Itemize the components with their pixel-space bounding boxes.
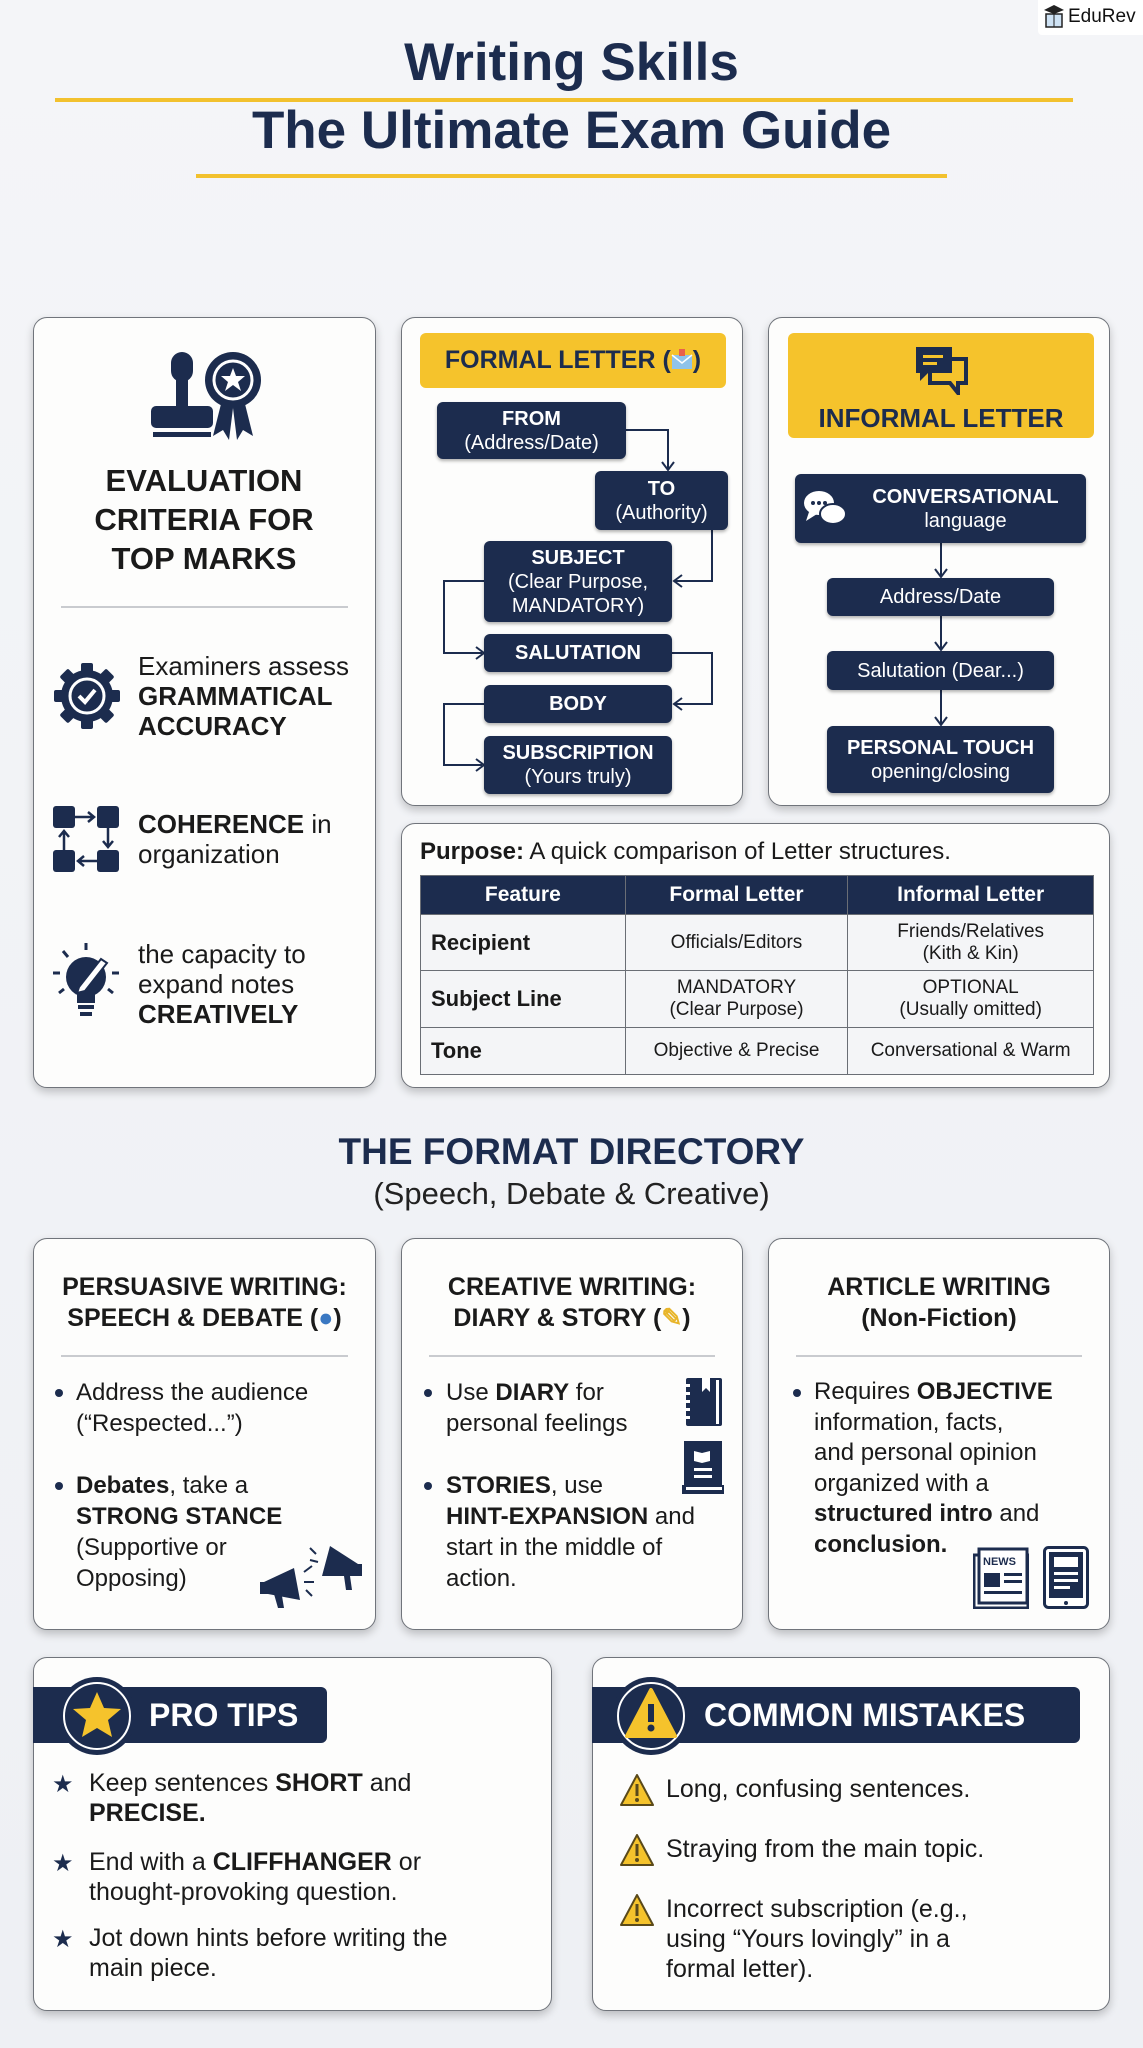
bullet: address audience: (“Respected...”): [76, 1410, 243, 1437]
bullet: debates: STRONG STANCE: [76, 1503, 282, 1530]
icon: megaphones: [260, 1546, 362, 1608]
bullet: stories: STORIES, use: [446, 1472, 603, 1499]
logo: EduRev: EduRev: [1068, 6, 1136, 27]
text: creatively: expand notes: [138, 969, 294, 999]
text: grammatical accuracy: ACCURACY: [138, 711, 287, 741]
table: letter comparison: Subject Line: [431, 986, 562, 1011]
bullet: stories: HINT-EXPANSION and: [446, 1503, 695, 1530]
bullet: objective: and personal opinion: [814, 1439, 1037, 1466]
logo: EduRev: [1038, 0, 1143, 35]
text: grammatical accuracy: [138, 651, 349, 741]
table: letter comparison: Feature: [485, 883, 561, 906]
heading: format directory: THE FORMAT DIRECTORY: [339, 1131, 804, 1172]
table: letter comparison: Tone: [431, 1038, 482, 1063]
box: body: BODY: [549, 693, 607, 715]
box: personal touch: [827, 726, 1054, 793]
text: grammatical accuracy: Examiners assess: [138, 651, 349, 681]
bullet: cliffhanger: [52, 1848, 421, 1906]
box: conversational: CONVERSATIONAL: [872, 486, 1059, 508]
table: letter comparison: OPTIONAL: [923, 977, 1019, 998]
panel: persuasive writing: [33, 1238, 376, 1630]
table: letter comparison: (Clear Purpose): [669, 999, 804, 1020]
box: address/date: Address/Date: [880, 586, 1001, 608]
heading: formal letter: [420, 333, 726, 388]
heading: evaluation criteria: CRITERIA FOR: [94, 502, 314, 537]
heading: format directory: (Speech, Debate & Creative): [373, 1176, 770, 1211]
heading: creative: DIARY & STORY (✎): [453, 1304, 691, 1332]
bullet: objective: [793, 1378, 1053, 1558]
heading: creative: CREATIVE WRITING:: [448, 1273, 696, 1301]
box: to: (Authority): [615, 502, 708, 524]
table: letter comparison: Formal Letter: [669, 883, 804, 906]
text: creatively: CREATIVELY: [138, 999, 298, 1029]
arrows: informal flow: [934, 543, 948, 726]
text: purpose: Purpose: A quick comparison of Letter structures.: [420, 838, 951, 865]
heading: informal letter: [788, 333, 1094, 438]
bullet: jot hints: [52, 1924, 448, 1982]
table: letter comparison: Conversational & Warm: [871, 1040, 1071, 1061]
icon: chat bubbles: [916, 347, 968, 395]
box: from: (Address/Date): [464, 432, 599, 454]
icon: diary: [686, 1378, 722, 1426]
box: salutation: [484, 634, 672, 672]
table: letter comparison: (Usually omitted): [899, 999, 1042, 1020]
heading: evaluation criteria: [94, 463, 314, 576]
title: [55, 33, 1073, 178]
title: Writing Skills: [404, 33, 739, 92]
box: salutation: [827, 651, 1054, 690]
icon: book: [682, 1441, 724, 1494]
bullet: jot hints: main piece.: [89, 1954, 217, 1982]
heading: evaluation criteria: TOP MARKS: [112, 541, 296, 576]
bullet: objective: organized with a: [814, 1470, 989, 1497]
box: body: [484, 685, 672, 723]
icon: gear check: [54, 663, 120, 729]
heading: creative: [448, 1273, 696, 1332]
heading: article: [827, 1273, 1051, 1332]
box: subscription: [484, 736, 672, 794]
box: from: [437, 402, 626, 459]
heading: formal letter: FORMAL LETTER ( ): [445, 346, 701, 374]
box: personal touch: PERSONAL TOUCH: [847, 736, 1034, 758]
box: subject: MANDATORY): [512, 594, 644, 616]
heading: evaluation criteria: EVALUATION: [106, 463, 302, 498]
bullet: stories: start in the middle of: [446, 1534, 662, 1561]
box: subscription: SUBSCRIPTION: [502, 742, 654, 764]
box: personal touch: opening/closing: [871, 760, 1010, 782]
bullet: debates: [55, 1472, 282, 1592]
bullet: address audience: [55, 1379, 308, 1437]
box: salutation: SALUTATION: [515, 642, 641, 664]
bullet: stories: [424, 1472, 695, 1592]
heading: article: ARTICLE WRITING: [827, 1273, 1051, 1301]
bullet: objective: Requires OBJECTIVE: [814, 1378, 1053, 1405]
bullet: short precise: Keep sentences SHORT and: [89, 1769, 411, 1797]
text: creatively: the capacity to: [138, 939, 306, 969]
bullet: debates: (Supportive or: [76, 1534, 227, 1561]
icon: newspaper: NEWS: [983, 1556, 1016, 1568]
box: subject: (Clear Purpose,: [508, 570, 648, 592]
panel: evaluation criteria: [33, 317, 376, 1088]
banner: pro tips: [33, 1687, 327, 1743]
icon: lightbulb pencil: [53, 943, 119, 1016]
bullet: short precise: [52, 1769, 411, 1827]
bullet: diary: [424, 1379, 627, 1437]
table: letter comparison: Informal Letter: [897, 883, 1044, 906]
table: letter comparison: [420, 875, 1094, 1075]
icon: star badge: [63, 1677, 131, 1755]
bullet: objective: structured intro and: [814, 1500, 1039, 1527]
panel: formal letter: [401, 317, 743, 806]
table: letter comparison: (Kith & Kin): [923, 942, 1019, 964]
panel: common mistakes: [592, 1657, 1110, 2011]
text: coherence: [138, 809, 332, 869]
icon: newspaper: [973, 1548, 1029, 1609]
banner: common mistakes: COMMON MISTAKES: [704, 1697, 1025, 1733]
bullet: cliffhanger: thought-provoking question.: [89, 1878, 398, 1906]
bullet: jot hints: Jot down hints before writing the: [89, 1924, 448, 1952]
arrows: formal flow: [443, 429, 713, 772]
table: letter comparison: Objective & Precise: [654, 1040, 819, 1061]
table: letter comparison: Friends/Relatives: [897, 920, 1044, 942]
bullet: incorrect subscription: Incorrect subscription (e.g.,: [666, 1895, 968, 1923]
bullet: short precise: ★: [52, 1771, 74, 1798]
heading: persuasive: [62, 1273, 347, 1332]
bullet: diary: Use DIARY for: [446, 1379, 604, 1406]
bullet: debates: Debates, take a: [76, 1472, 248, 1499]
icon: warning badge: [617, 1677, 685, 1755]
icon: tablet: [1043, 1546, 1089, 1609]
bullet: objective: conclusion.: [814, 1531, 947, 1558]
panel: creative writing: [401, 1238, 743, 1630]
title: The Ultimate Exam Guide: [252, 101, 891, 160]
table: letter comparison: Recipient: [431, 930, 530, 954]
banner: common mistakes: [592, 1687, 1080, 1743]
bullet: debates: Opposing): [76, 1565, 187, 1592]
heading: persuasive: PERSUASIVE WRITING:: [62, 1273, 347, 1301]
bullet: jot hints: ★: [52, 1926, 74, 1953]
icon: flow squares: [53, 806, 119, 872]
banner: pro tips: PRO TIPS: [149, 1697, 298, 1733]
bullet: long sentences: Long, confusing sentences.: [666, 1775, 970, 1803]
box: to: [595, 471, 728, 530]
text: grammatical accuracy: GRAMMATICAL: [138, 681, 332, 711]
bullet: straying: Straying from the main topic.: [666, 1835, 984, 1863]
heading: format directory: [338, 1131, 804, 1211]
box: conversational: language: [924, 510, 1007, 532]
panel: comparison table: [401, 823, 1110, 1088]
bullet: diary: personal feelings: [446, 1410, 627, 1437]
box: conversational: [795, 474, 1086, 543]
box: salutation: Salutation (Dear...): [857, 660, 1024, 682]
box: subscription: (Yours truly): [524, 766, 632, 788]
panel: pro tips: [33, 1657, 552, 2011]
box: from: FROM: [502, 408, 561, 430]
bullet: incorrect subscription: [620, 1894, 968, 1983]
bullet: cliffhanger: End with a CLIFFHANGER or: [89, 1848, 421, 1876]
text: creatively: [138, 939, 306, 1029]
table: letter comparison: Officials/Editors: [671, 932, 802, 952]
heading: informal letter: INFORMAL LETTER: [818, 403, 1064, 433]
icon: stamp and medal: [151, 352, 261, 440]
bullet: objective: information, facts,: [814, 1409, 1003, 1436]
bullet: incorrect subscription: formal letter).: [666, 1955, 813, 1983]
bullet: cliffhanger: ★: [52, 1850, 74, 1877]
box: to: TO: [648, 478, 675, 500]
bullet: stories: action.: [446, 1565, 517, 1592]
box: subject: SUBJECT: [531, 546, 625, 568]
bullet: address audience: Address the audience: [76, 1379, 308, 1406]
table: letter comparison: MANDATORY: [677, 977, 796, 998]
text: coherence: COHERENCE in: [138, 809, 332, 839]
heading: persuasive: SPEECH & DEBATE (●): [67, 1304, 342, 1332]
heading: article: (Non-Fiction): [861, 1304, 1017, 1332]
bullet: short precise: PRECISE.: [89, 1799, 206, 1827]
box: subject: [484, 541, 672, 622]
panel: article writing: [768, 1238, 1110, 1630]
panel: informal letter: [768, 317, 1110, 806]
bullet: incorrect subscription: using “Yours lovingly” in a: [666, 1925, 950, 1953]
box: address/date: [827, 578, 1054, 616]
text: coherence: organization: [138, 839, 280, 869]
